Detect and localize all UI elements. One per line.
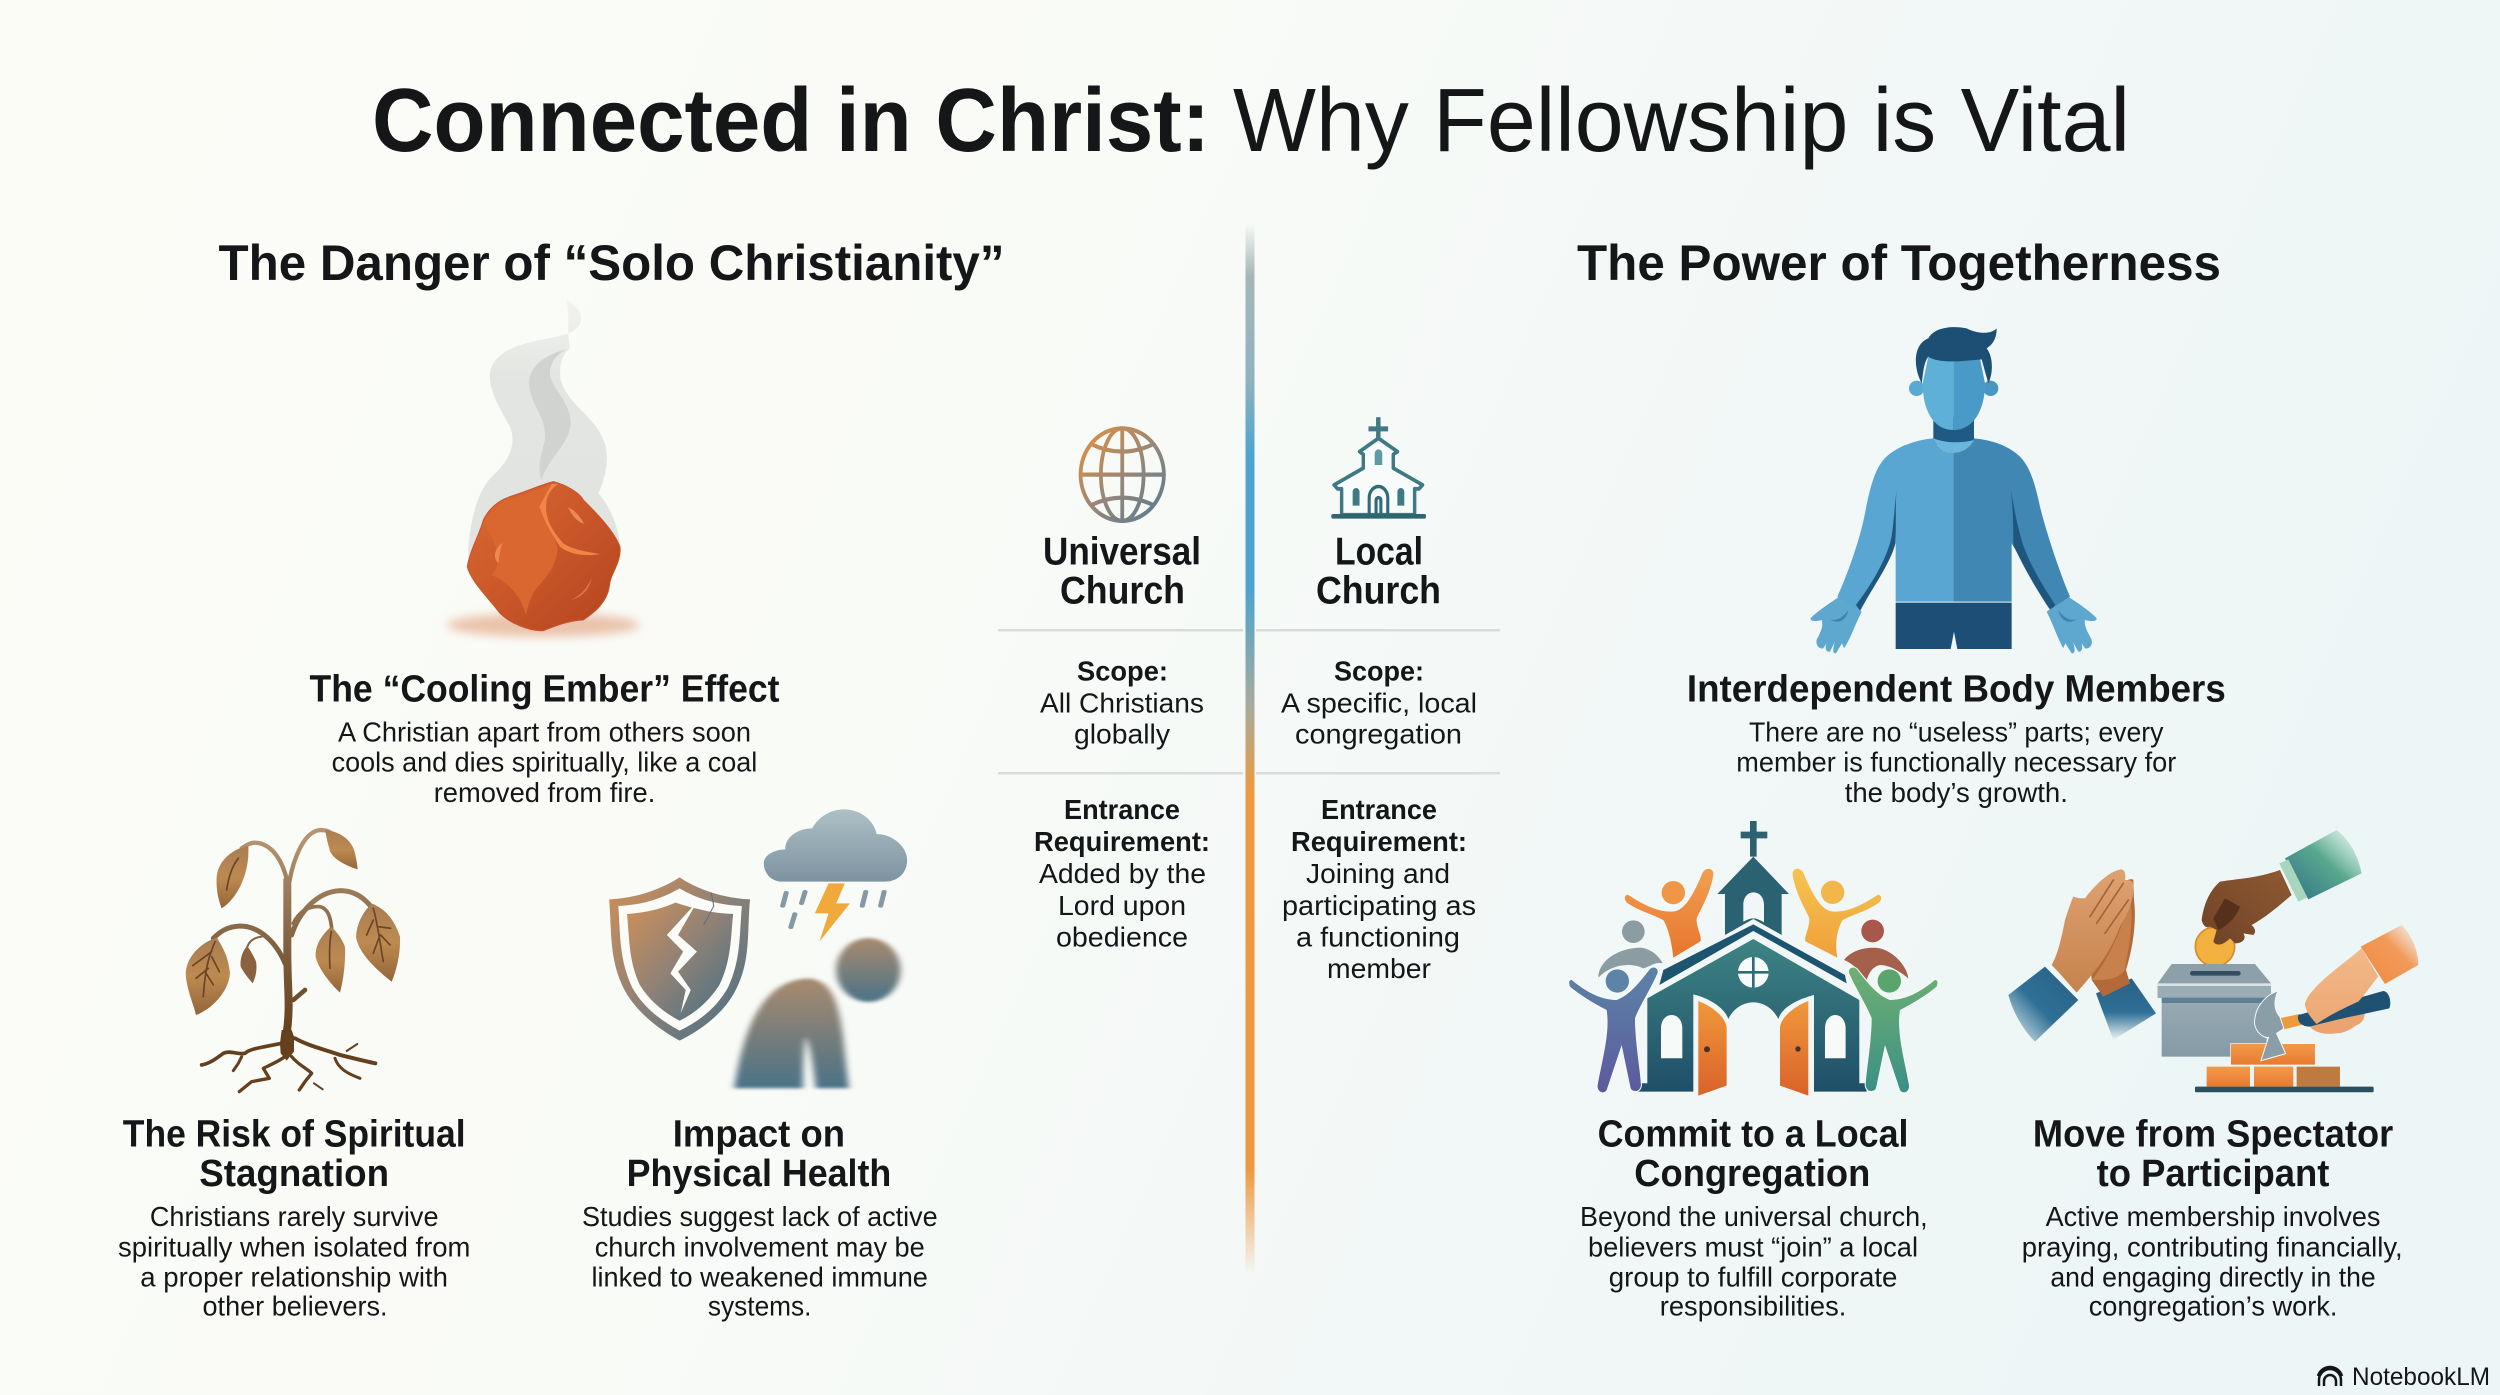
card: commit to a local congregation [1569, 821, 1937, 1321]
text: body members description: There are no “useless” parts; every [1749, 716, 2164, 748]
text: local entrance requirement: Requirement: [1291, 826, 1467, 857]
card: interdependent body members [1687, 327, 2226, 808]
text: cooling ember description: removed from fire. [434, 777, 655, 808]
icon: praying hands, offering and hammer with bricks [2008, 830, 2418, 1092]
text: physical health description [582, 1201, 938, 1321]
text: universal scope: Scope: [1077, 656, 1168, 686]
text: physical health description: linked to weakened immune [592, 1262, 928, 1293]
text: local entrance requirement [1282, 794, 1476, 984]
text: universal entrance requirement: Entrance [1064, 794, 1180, 825]
text: local scope [1281, 656, 1477, 749]
text: congregation description: believers must “join” a local [1588, 1231, 1918, 1262]
text: cooling ember description [332, 716, 757, 808]
heading: interdependent body members: Interdependent Body Members [1687, 668, 2226, 710]
panel: the power of togetherness [1569, 235, 2418, 1321]
icon: blue human figure [1811, 327, 2097, 653]
text: stagnation description [118, 1201, 470, 1321]
text: participant description: Active membership involves [2046, 1201, 2380, 1232]
icon: cooling ember with smoke [447, 300, 640, 637]
title [372, 71, 2130, 171]
heading: local church: Local [1335, 530, 1423, 574]
icon: wilted plant [186, 830, 400, 1092]
text: congregation description: Beyond the universal church, [1580, 1201, 1928, 1232]
text: universal entrance requirement: Added by the [1039, 858, 1206, 889]
text: body members description: the body’s growth. [1845, 777, 2068, 808]
heading: commit to a local congregation: Congregation [1634, 1153, 1870, 1195]
logo: NotebookLM: NotebookLM [2352, 1363, 2490, 1391]
text: congregation description: responsibilities. [1660, 1290, 1846, 1321]
heading: universal church [1043, 530, 1201, 612]
text: physical health description: systems. [708, 1290, 812, 1321]
heading: commit to a local congregation: Commit to a Local [1598, 1114, 1908, 1156]
text: local entrance requirement: participating as [1282, 890, 1476, 921]
text: participant description: and engaging directly in the [2050, 1262, 2376, 1293]
heading: local church: Church [1316, 570, 1441, 612]
text: universal entrance requirement: obedience [1056, 922, 1188, 952]
heading: move from spectator to participant: Move from Spectator [2033, 1114, 2393, 1156]
heading: risk of spiritual stagnation: Stagnation [199, 1153, 389, 1195]
text: local scope: Scope: [1334, 656, 1424, 686]
heading: cooling ember: The “Cooling Ember” Effect [310, 668, 780, 710]
heading: togetherness: The Power of Togetherness [1577, 235, 2221, 291]
text: universal scope [1040, 656, 1204, 749]
heading: impact on physical health: Physical Health [627, 1153, 891, 1195]
heading: risk of spiritual stagnation [123, 1114, 466, 1195]
text: universal entrance requirement [1034, 794, 1210, 952]
text: local entrance requirement: Entrance [1321, 794, 1437, 825]
heading: move from spectator to participant: to Participant [2097, 1153, 2330, 1195]
text: universal scope: globally [1074, 718, 1170, 749]
heading: move from spectator to participant [2033, 1114, 2393, 1195]
text: local scope: congregation [1295, 718, 1462, 749]
text: body members description: member is functionally necessary for [1736, 747, 2176, 778]
panel: universal vs local comparison [998, 417, 1500, 984]
text: physical health description: Studies suggest lack of active [582, 1201, 938, 1232]
heading: universal church: Universal [1043, 530, 1201, 574]
text: participant description: congregation’s work. [2089, 1290, 2337, 1321]
text: congregation description [1580, 1201, 1928, 1321]
column: local church [1281, 417, 1477, 984]
heading: universal church: Church [1060, 570, 1185, 612]
text: local scope: A specific, local [1281, 687, 1477, 718]
icon: church with people around it [1569, 821, 1937, 1096]
title: Connected in Christ: [372, 71, 1210, 171]
card: spiritual stagnation [118, 830, 470, 1321]
text: stagnation description: Christians rarely survive [150, 1201, 438, 1232]
heading: risk of spiritual stagnation: The Risk of Spiritual [123, 1114, 466, 1156]
title: Why Fellowship is Vital [1233, 71, 2130, 171]
text: physical health description: church involvement may be [595, 1231, 925, 1262]
heading: local church [1316, 530, 1441, 612]
text: cooling ember description: A Christian apart from others soon [338, 716, 751, 748]
text: congregation description: group to fulfill corporate [1609, 1262, 1897, 1293]
panel: the danger of solo christianity [118, 235, 1004, 1321]
text: local entrance requirement: member [1327, 953, 1431, 984]
card: cooling ember [310, 300, 780, 808]
text: stagnation description: a proper relationship with [140, 1262, 448, 1293]
text: stagnation description: other believers. [202, 1290, 388, 1321]
heading: danger: The Danger of “Solo Christianity” [218, 235, 1004, 291]
icon: globe [1081, 428, 1164, 521]
text: local entrance requirement: a functioning [1296, 922, 1460, 952]
text: participant description [2022, 1201, 2403, 1321]
central axis gradient line [1246, 223, 1254, 1275]
text: local entrance requirement: Joining and [1306, 858, 1450, 889]
icon: church outline [1331, 417, 1426, 519]
text: universal entrance requirement: Lord upon [1058, 890, 1186, 921]
text: participant description: praying, contributing financially, [2022, 1231, 2403, 1262]
column: universal church [1034, 428, 1210, 952]
text: stagnation description: spiritually when isolated from [118, 1231, 470, 1262]
text: cooling ember description: cools and dies spiritually, like a coal [332, 747, 757, 778]
text: universal entrance requirement: Requirement: [1034, 826, 1210, 857]
heading: impact on physical health: Impact on [673, 1114, 845, 1156]
card: move from spectator to participant [2008, 830, 2418, 1321]
text: body members description [1736, 716, 2176, 808]
heading: impact on physical health [627, 1114, 891, 1195]
heading: commit to a local congregation [1598, 1114, 1908, 1195]
icon: cracked shield, storm cloud and slumped person [609, 809, 907, 1088]
text: universal scope: All Christians [1040, 687, 1204, 718]
card: physical health [582, 809, 938, 1321]
